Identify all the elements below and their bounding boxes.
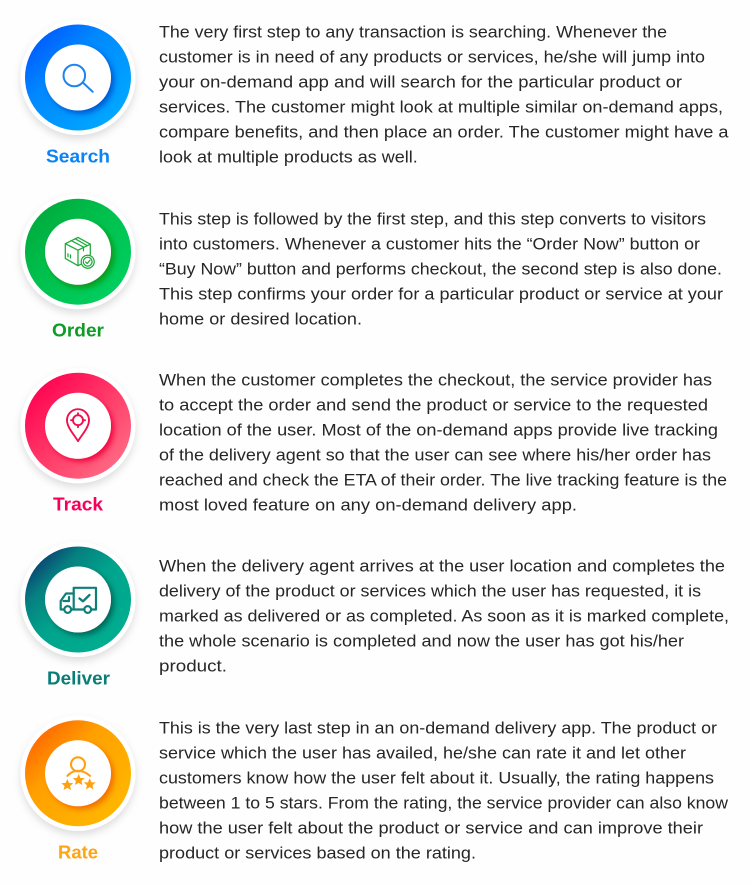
description: search: compare benefits, and then place an order. The customer might have a <box>159 122 729 142</box>
description: rate: product or services based on the rating. <box>159 844 476 862</box>
description: track: When the customer completes the checkout, the service provider has <box>159 370 712 390</box>
step 4: deliver <box>20 542 729 689</box>
step 1: search <box>20 20 729 166</box>
description: rate: between 1 to 5 stars. From the rating, the service provider can also know <box>159 794 729 812</box>
icon badge: search <box>20 20 136 135</box>
description: deliver: delivery of the product or services which the user has requested, it is <box>159 582 701 600</box>
description: track: reached and check the ETA of their order. The live tracking feature is the <box>159 470 727 490</box>
label: Order: Order <box>52 320 104 341</box>
description: search <box>159 22 729 166</box>
description: search: services. The customer might look at multiple similar on-demand apps, <box>159 98 723 116</box>
description: order: home or desired location. <box>159 310 362 328</box>
step 5: rate <box>20 716 729 862</box>
description: track: of the delivery agent so that the user can see where his/her order has <box>159 446 711 464</box>
description: track: location of the user. Most of the on-demand apps provide live tracking <box>159 420 718 440</box>
icon badge: deliver <box>20 542 136 657</box>
description: rate: how the user felt about the product or service and can improve their <box>159 818 703 838</box>
icon badge: track <box>20 368 136 483</box>
icon badge: order <box>20 194 136 309</box>
description: rate: customers know how the user felt about it. Usually, the rating happens <box>159 768 714 788</box>
label: Track: Track <box>53 494 104 515</box>
description: track: most loved feature on any on-demand delivery app. <box>159 496 577 514</box>
label: Deliver: Deliver <box>47 668 110 689</box>
description: rate <box>159 718 729 862</box>
description: rate: This is the very last step in an on-demand delivery app. The product or <box>159 718 717 738</box>
label: Search: Search <box>46 146 110 166</box>
description: order: This step confirms your order for a particular product or service at your <box>159 284 723 304</box>
description: order: “Buy Now” button and performs checkout, the second step is also done. <box>159 260 722 278</box>
description: search: The very first step to any transaction is searching. Whenever the <box>159 22 667 42</box>
description: order <box>159 210 723 328</box>
description: deliver: the whole scenario is completed and now the user has got his/her <box>159 632 684 650</box>
description: search: your on-demand app and will search for the particular product or <box>159 72 682 92</box>
description: search: customer is in need of any products or services, he/she will jump into <box>159 48 705 66</box>
description: track <box>159 370 727 514</box>
description: deliver: marked as delivered or as completed. As soon as it is marked complete, <box>159 606 729 626</box>
description: deliver: product. <box>159 656 227 676</box>
step 3: track <box>20 368 727 515</box>
description: order: This step is followed by the first step, and this step converts to visitors <box>159 210 706 228</box>
description: track: to accept the order and send the product or service to the requested <box>159 396 708 414</box>
description: deliver: When the delivery agent arrives at the user location and completes the <box>159 556 725 576</box>
description: deliver <box>159 556 729 676</box>
icon badge: rate <box>20 716 136 831</box>
description: rate: service which the user has availed, he/she can rate it and let other <box>159 744 686 762</box>
label: Rate: Rate <box>58 841 98 862</box>
description: order: into customers. Whenever a customer hits the “Order Now” button or <box>159 234 700 254</box>
description: search: look at multiple products as well. <box>159 148 418 166</box>
step 2: order <box>20 194 723 341</box>
